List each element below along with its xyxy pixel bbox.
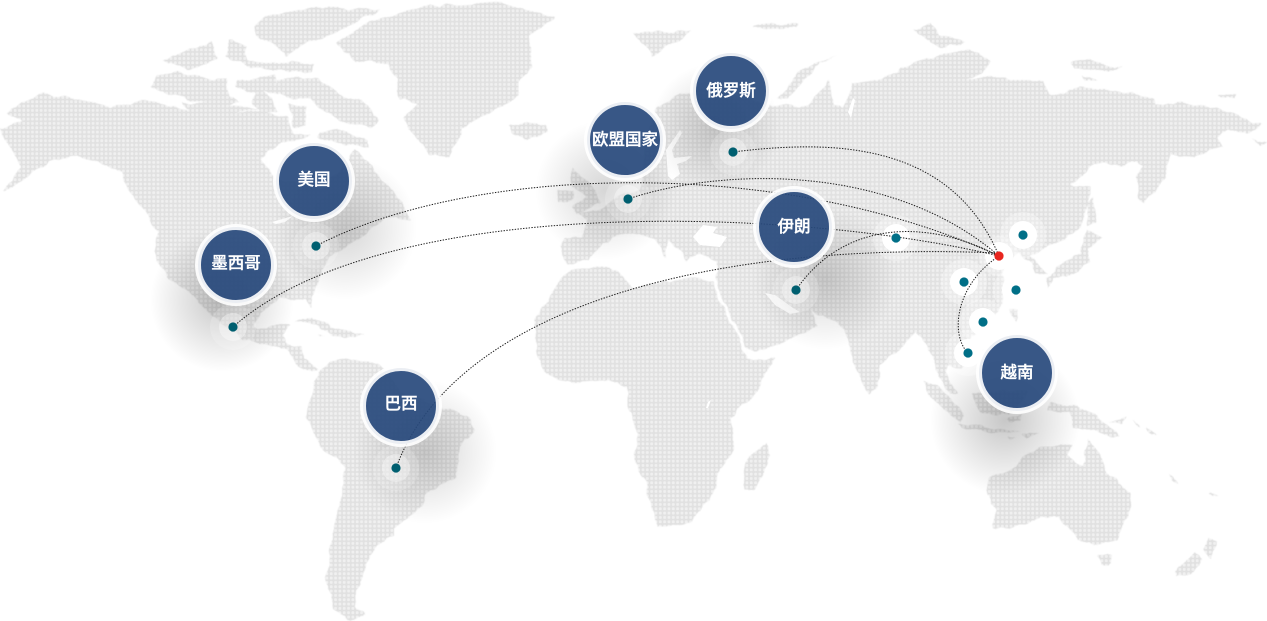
bubble: russia: 俄罗斯 — [706, 81, 756, 100]
halo: usa — [293, 223, 339, 269]
great lakes — [272, 216, 293, 224]
australia — [987, 440, 1130, 545]
route: usa — [316, 183, 999, 256]
shadow: vietnam — [930, 345, 1080, 495]
route: iran — [796, 232, 999, 290]
bubble: vietnam — [979, 335, 1055, 411]
bubble shadows — [150, 63, 1080, 524]
route: russia — [733, 147, 999, 256]
halo: south china — [960, 299, 1006, 345]
dot: origin red — [994, 251, 1004, 261]
dot: vietnam — [963, 348, 973, 358]
bubble: eu: 欧盟国家 — [592, 129, 658, 149]
madagascar — [743, 443, 770, 490]
arctic islands — [150, 7, 379, 147]
shadow: brazil — [353, 380, 497, 524]
tasmania and new zealand — [1097, 538, 1218, 578]
shadow: usa — [273, 156, 417, 300]
southeast asia islands — [923, 382, 1157, 439]
african lake — [706, 400, 711, 408]
dot: iran — [791, 285, 801, 295]
bubble: iran — [756, 189, 832, 265]
dot: east china — [1011, 285, 1021, 295]
dot: south china — [978, 317, 988, 327]
halo: central asia — [873, 215, 919, 261]
black sea — [693, 225, 727, 247]
japan and sakhalin — [1010, 197, 1103, 322]
halo: west china — [941, 259, 987, 305]
north pacific islands — [1070, 60, 1267, 497]
route: mexico — [233, 221, 999, 327]
shadow: mexico — [150, 228, 294, 372]
dot: usa — [311, 241, 321, 251]
halo: iran — [773, 267, 819, 313]
halo: north china — [1000, 212, 1046, 258]
dot: brazil — [391, 463, 401, 473]
bubble: eu — [587, 102, 663, 178]
persian gulf — [765, 293, 800, 314]
halo: russia — [710, 129, 756, 175]
bubble: mexico: 墨西哥 — [211, 254, 261, 272]
bubble: brazil — [363, 368, 439, 444]
halo: brazil — [373, 445, 419, 491]
bubble: usa — [276, 143, 352, 219]
bubble: usa: 美国 — [298, 170, 330, 189]
route lines — [233, 147, 999, 468]
location dots — [228, 147, 1028, 473]
baltic sea — [666, 130, 692, 180]
iceland and svalbard — [509, 22, 963, 140]
bubble: russia — [693, 53, 769, 129]
dot: west china — [959, 277, 969, 287]
route: vietnam — [958, 256, 999, 353]
shadow: russia — [650, 63, 780, 193]
bubble: vietnam: 越南 — [1000, 363, 1034, 382]
arctic gulf — [848, 98, 855, 118]
route: brazil — [396, 252, 999, 468]
greenland — [336, 2, 554, 157]
eurasia — [560, 50, 1262, 395]
africa — [535, 267, 774, 527]
halo: origin — [979, 236, 1019, 276]
shadow: iran — [753, 206, 897, 350]
halo: east china — [993, 267, 1039, 313]
location halos — [210, 129, 1046, 491]
halo: vietnam — [945, 330, 991, 376]
bubble: brazil: 巴西 — [384, 395, 418, 413]
halo: eu — [605, 176, 651, 222]
bubble: mexico — [198, 227, 274, 303]
north america — [0, 94, 411, 372]
dot: mexico — [228, 322, 238, 332]
caribbean islands — [294, 318, 365, 337]
bubble: iran: 伊朗 — [778, 217, 810, 236]
route: eu — [628, 179, 999, 256]
dot: north china — [1018, 230, 1028, 240]
shadow: eu — [535, 120, 675, 260]
dot: central asia — [891, 233, 901, 243]
halo: mexico — [210, 304, 256, 350]
south america — [306, 358, 474, 620]
british isles — [557, 167, 600, 213]
dot: eu — [623, 194, 633, 204]
dot: russia — [728, 147, 738, 157]
inland seas — [272, 98, 855, 408]
